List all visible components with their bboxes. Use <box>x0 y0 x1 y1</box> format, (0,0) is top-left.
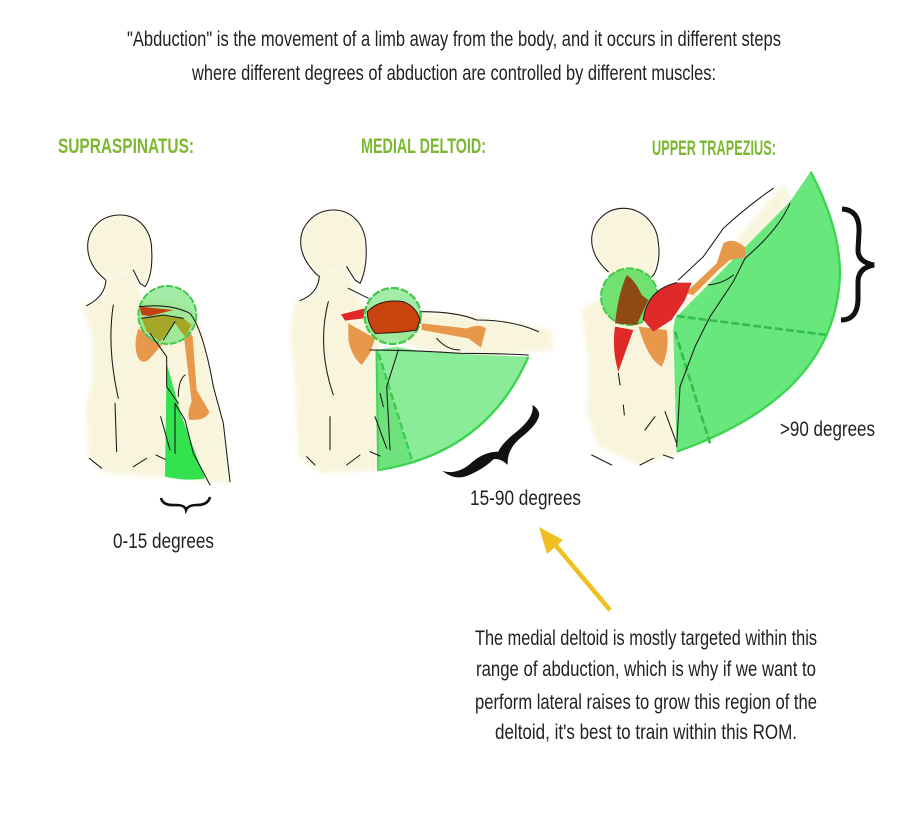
bracket: over 90 degrees <box>841 209 874 320</box>
range wedge <box>165 363 205 480</box>
intro text <box>127 28 781 85</box>
intro text: where different degrees of abduction are controlled by different muscles: <box>191 62 716 85</box>
range wedge edge <box>677 172 840 452</box>
heading: medial deltoid: MEDIAL DELTOID: <box>361 135 486 158</box>
outlines <box>87 215 230 485</box>
arm bone <box>685 241 745 295</box>
arm bone <box>422 323 486 348</box>
body silhouette <box>582 183 792 465</box>
figure: upper trapezius over 90 degrees <box>582 172 840 465</box>
highlight circle <box>601 268 658 325</box>
label: 0-15 degrees: 0-15 degrees <box>113 530 214 553</box>
shoulder blade <box>638 327 668 367</box>
callout text <box>475 627 817 744</box>
arrow: yellow pointer <box>539 527 610 610</box>
outlines <box>592 188 790 465</box>
figure: medial deltoid 15-90 degrees <box>290 210 553 478</box>
supraspinatus muscle <box>139 307 173 316</box>
lower trapezius <box>614 327 633 372</box>
head <box>592 208 659 277</box>
range wedge <box>377 347 528 470</box>
heading: upper trapezius: UPPER TRAPEZIUS: <box>652 137 776 160</box>
label: 15-90 degrees: 15-90 degrees <box>470 487 581 510</box>
shoulder blade <box>348 323 375 365</box>
figure: supraspinatus 0-15 degrees <box>82 215 230 485</box>
body silhouette <box>82 267 230 483</box>
heading: supraspinatus: SUPRASPINATUS: <box>58 135 194 158</box>
dashed range line <box>378 353 412 462</box>
callout text: perform lateral raises to grow this region of the <box>475 691 817 714</box>
dashed range lines <box>675 316 827 443</box>
deltoid muscle <box>643 283 692 332</box>
range wedge edge <box>377 350 528 470</box>
trapezius tip <box>341 308 365 321</box>
left wedge shade <box>377 350 412 470</box>
highlight circle <box>365 288 421 344</box>
outlines <box>300 210 538 465</box>
deltoid muscle <box>367 301 420 333</box>
label: over 90 degrees: >90 degrees <box>780 418 875 441</box>
body silhouette <box>290 267 553 473</box>
callout text: deltoid, it's best to train within this ROM. <box>495 721 797 744</box>
bracket: 0-15 degrees <box>161 497 210 510</box>
shoulder joint <box>142 315 192 342</box>
range wedge <box>673 172 840 452</box>
head <box>301 210 366 283</box>
upper trapezius muscle <box>615 275 648 325</box>
head <box>88 215 152 287</box>
highlight circle <box>138 286 196 344</box>
shoulder blade <box>135 328 162 362</box>
callout text: range of abduction, which is why if we want to <box>476 658 816 681</box>
bracket: 15-90 degrees <box>442 405 539 478</box>
arm bone <box>184 323 209 420</box>
